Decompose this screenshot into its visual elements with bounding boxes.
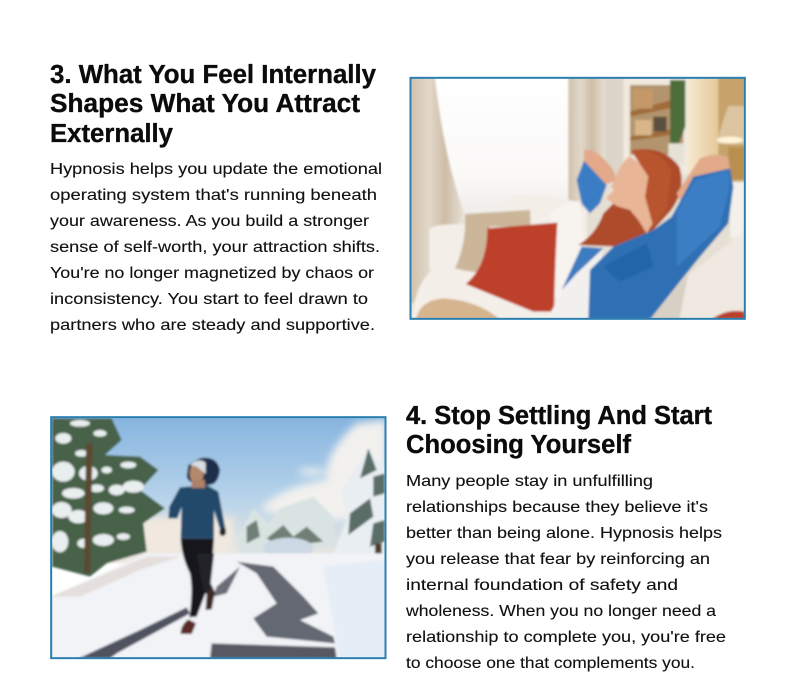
body text: section 4: internal foundation of safety and — [406, 577, 678, 594]
sofa — [428, 207, 587, 270]
body text: section 4: Many people stay in unfulfilling — [406, 473, 653, 490]
body text: section 4: better than being alone. Hypnosis helps — [406, 525, 722, 542]
photo border — [51, 417, 386, 658]
left tree — [52, 418, 165, 577]
heading: section 3: Externally — [50, 120, 174, 148]
body text: section 3: operating system that's running beneath — [50, 187, 377, 204]
right tree — [333, 448, 386, 553]
snow ground — [51, 553, 386, 659]
heading: section 3 — [50, 61, 377, 148]
arms — [584, 150, 617, 185]
runner torso — [168, 485, 226, 538]
body text: section 3: sense of self-worth, your attraction shifts. — [50, 239, 380, 256]
hair front — [631, 150, 672, 227]
body text: section 3: partners who are steady and supportive. — [50, 317, 375, 334]
heading: section 3: Shapes What You Attract — [50, 90, 361, 118]
heading: section 4 — [406, 402, 712, 459]
body text: section 4: wholeness. When you no longer need a — [405, 603, 716, 620]
runner shoes — [181, 619, 196, 634]
runner legs — [181, 538, 214, 617]
body text: section 4: you release that fear by reinforcing an — [406, 551, 710, 568]
body text: section 3: your awareness. As you build a stronger — [50, 213, 370, 230]
body text: section 3: You're no longer magnetized by chaos or — [50, 265, 375, 282]
heading: section 4: Choosing Yourself — [406, 431, 632, 459]
hair behind — [578, 149, 682, 247]
body text: section 4: to choose one that complements you. — [406, 655, 695, 672]
body text: section 3 — [50, 161, 382, 334]
heading: section 4: 4. Stop Settling And Start — [406, 402, 712, 430]
photo: woman running in snow — [50, 416, 386, 660]
white top — [547, 248, 603, 319]
body text: section 4: relationship to complete you, you're free — [406, 629, 726, 646]
photo border — [410, 78, 745, 319]
panel: section 3 text — [50, 61, 382, 334]
body text: section 3: Hypnosis helps you update the emotional — [50, 161, 382, 178]
denim shirt — [588, 168, 733, 319]
photo: woman relaxing on sofa — [410, 76, 746, 320]
road — [237, 562, 335, 643]
face — [606, 156, 657, 233]
heading: section 3: 3. What You Feel Internally — [50, 61, 377, 89]
body text: section 3: inconsistency. You start to feel drawn to — [50, 291, 368, 308]
panel: section 4 text — [405, 402, 726, 672]
runner head — [187, 458, 220, 485]
body text: section 4 — [405, 473, 726, 672]
far trees — [237, 497, 337, 553]
body text: section 4: relationships because they believe it's — [406, 499, 708, 516]
